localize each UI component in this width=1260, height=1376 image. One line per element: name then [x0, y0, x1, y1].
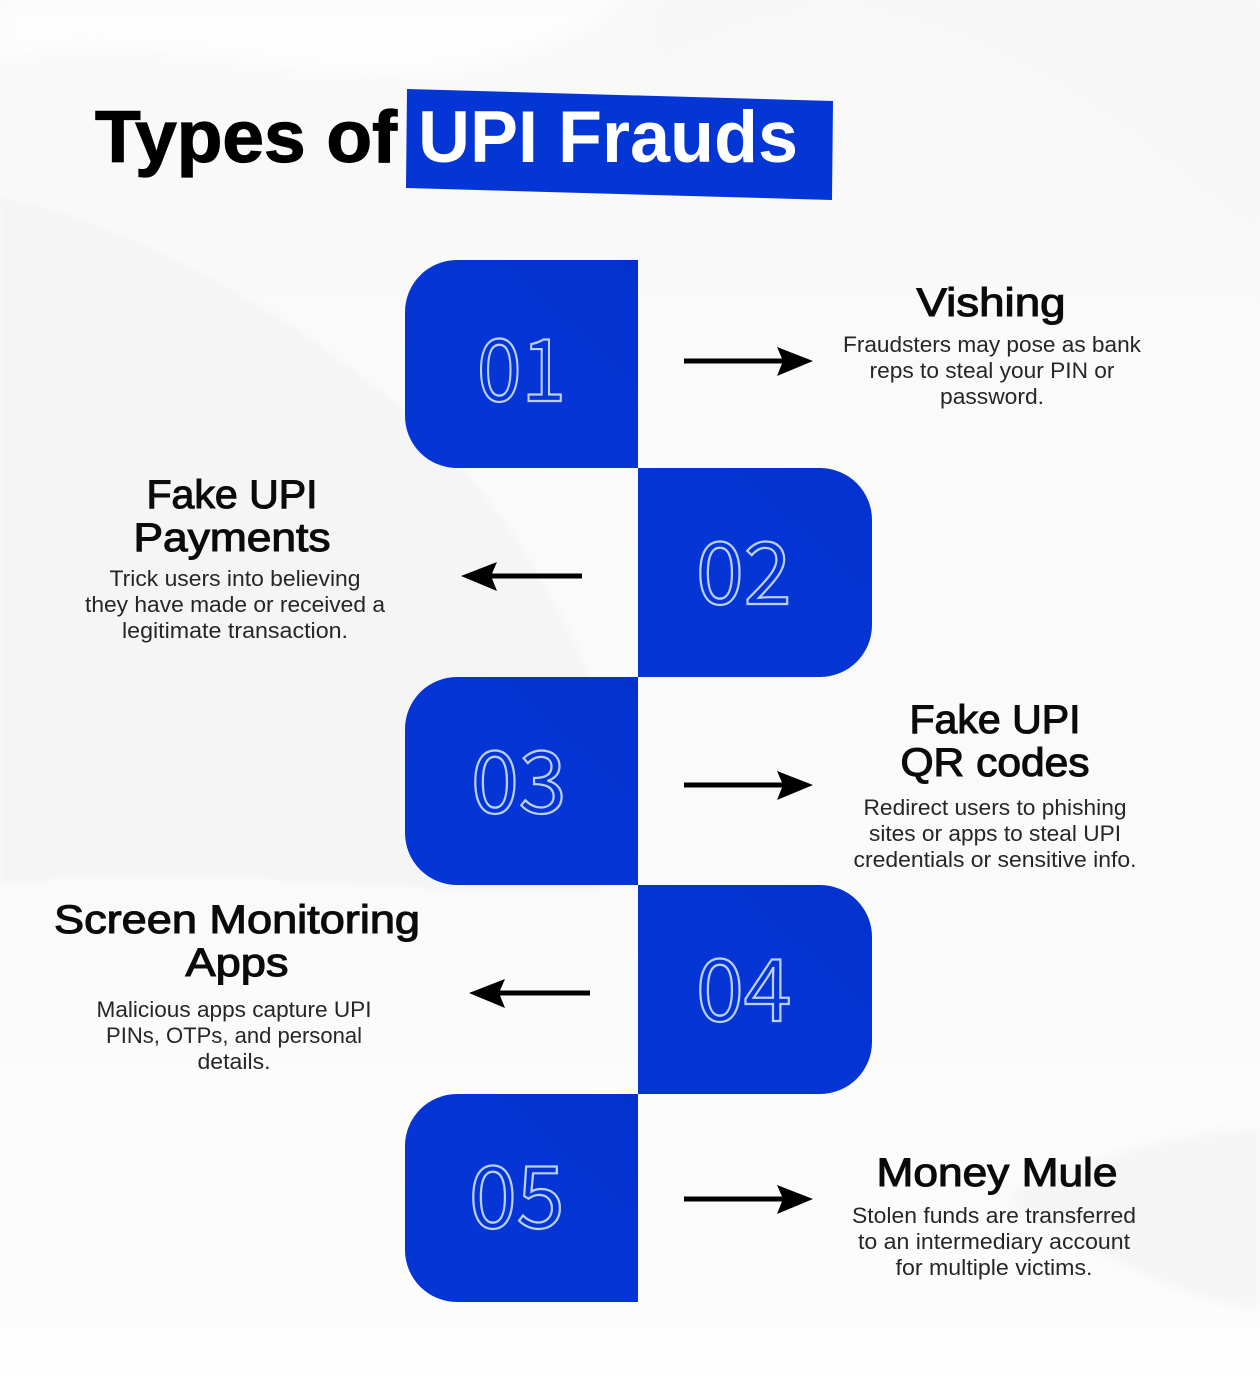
- number block 05: [405, 1094, 638, 1302]
- number 02: 02: [696, 504, 791, 629]
- number block 04: [638, 885, 872, 1094]
- title text: Types of: Types of: [95, 97, 398, 178]
- title text: UPI Frauds: UPI Frauds: [418, 97, 798, 178]
- number 04: 04: [696, 921, 791, 1046]
- description: Vishing: Fraudsters may pose as bank: [843, 332, 1142, 357]
- description: Money Mule: for multiple victims.: [896, 1255, 1092, 1280]
- description: Fake UPI Payments: legitimate transaction.: [122, 618, 348, 643]
- heading: Screen Monitoring Apps: Screen Monitoring: [54, 898, 420, 942]
- number 05: 05: [469, 1128, 564, 1253]
- description: Fake UPI QR codes: Redirect users to phishing: [864, 795, 1126, 820]
- description: Vishing: password.: [940, 384, 1044, 409]
- heading: Fake UPI Payments: Payments: [134, 516, 330, 560]
- arrow: left to Screen Monitoring Apps: [469, 979, 590, 1008]
- description: Screen Monitoring Apps: details.: [198, 1049, 270, 1074]
- description: Vishing: reps to steal your PIN or: [870, 358, 1114, 383]
- number block 03: [405, 677, 638, 885]
- description: Fake UPI Payments: they have made or received a: [85, 592, 386, 617]
- heading: Money Mule: Money Mule: [876, 1151, 1118, 1195]
- heading: Fake UPI Payments: Fake UPI: [146, 473, 318, 517]
- arrow: right to Fake UPI QR codes: [684, 771, 813, 800]
- description: Screen Monitoring Apps: Malicious apps capture UPI: [96, 997, 372, 1022]
- heading: Fake UPI QR codes: Fake UPI: [910, 698, 1080, 742]
- step 05 panel: [405, 1094, 1136, 1302]
- description: Money Mule: to an intermediary account: [858, 1229, 1130, 1254]
- description: Money Mule: Stolen funds are transferred: [852, 1203, 1136, 1228]
- heading: Vishing: Vishing: [916, 281, 1066, 325]
- step 01 panel: [405, 260, 1142, 468]
- description: Screen Monitoring Apps: PINs, OTPs, and personal: [106, 1023, 362, 1048]
- number 01: 01: [477, 301, 566, 426]
- heading: Screen Monitoring Apps: Apps: [186, 941, 288, 985]
- number 03: 03: [471, 713, 566, 838]
- title highlight box: [406, 89, 833, 200]
- heading: Fake UPI QR codes: QR codes: [900, 741, 1090, 785]
- arrow: right to Money Mule: [684, 1185, 813, 1214]
- description: Fake UPI QR codes: sites or apps to steal UPI: [869, 821, 1121, 846]
- step 02 panel: [85, 468, 872, 677]
- arrow: right to Vishing: [684, 347, 813, 376]
- number block 01: [405, 260, 638, 468]
- title: [95, 89, 833, 200]
- arrow: left to Fake UPI Payments: [461, 562, 582, 591]
- step 03 panel: [405, 677, 1136, 885]
- description: Fake UPI QR codes: credentials or sensitive info.: [854, 847, 1136, 872]
- description: Fake UPI Payments: Trick users into believing: [110, 566, 360, 591]
- number block 02: [638, 468, 872, 677]
- step 04 panel: [54, 885, 872, 1094]
